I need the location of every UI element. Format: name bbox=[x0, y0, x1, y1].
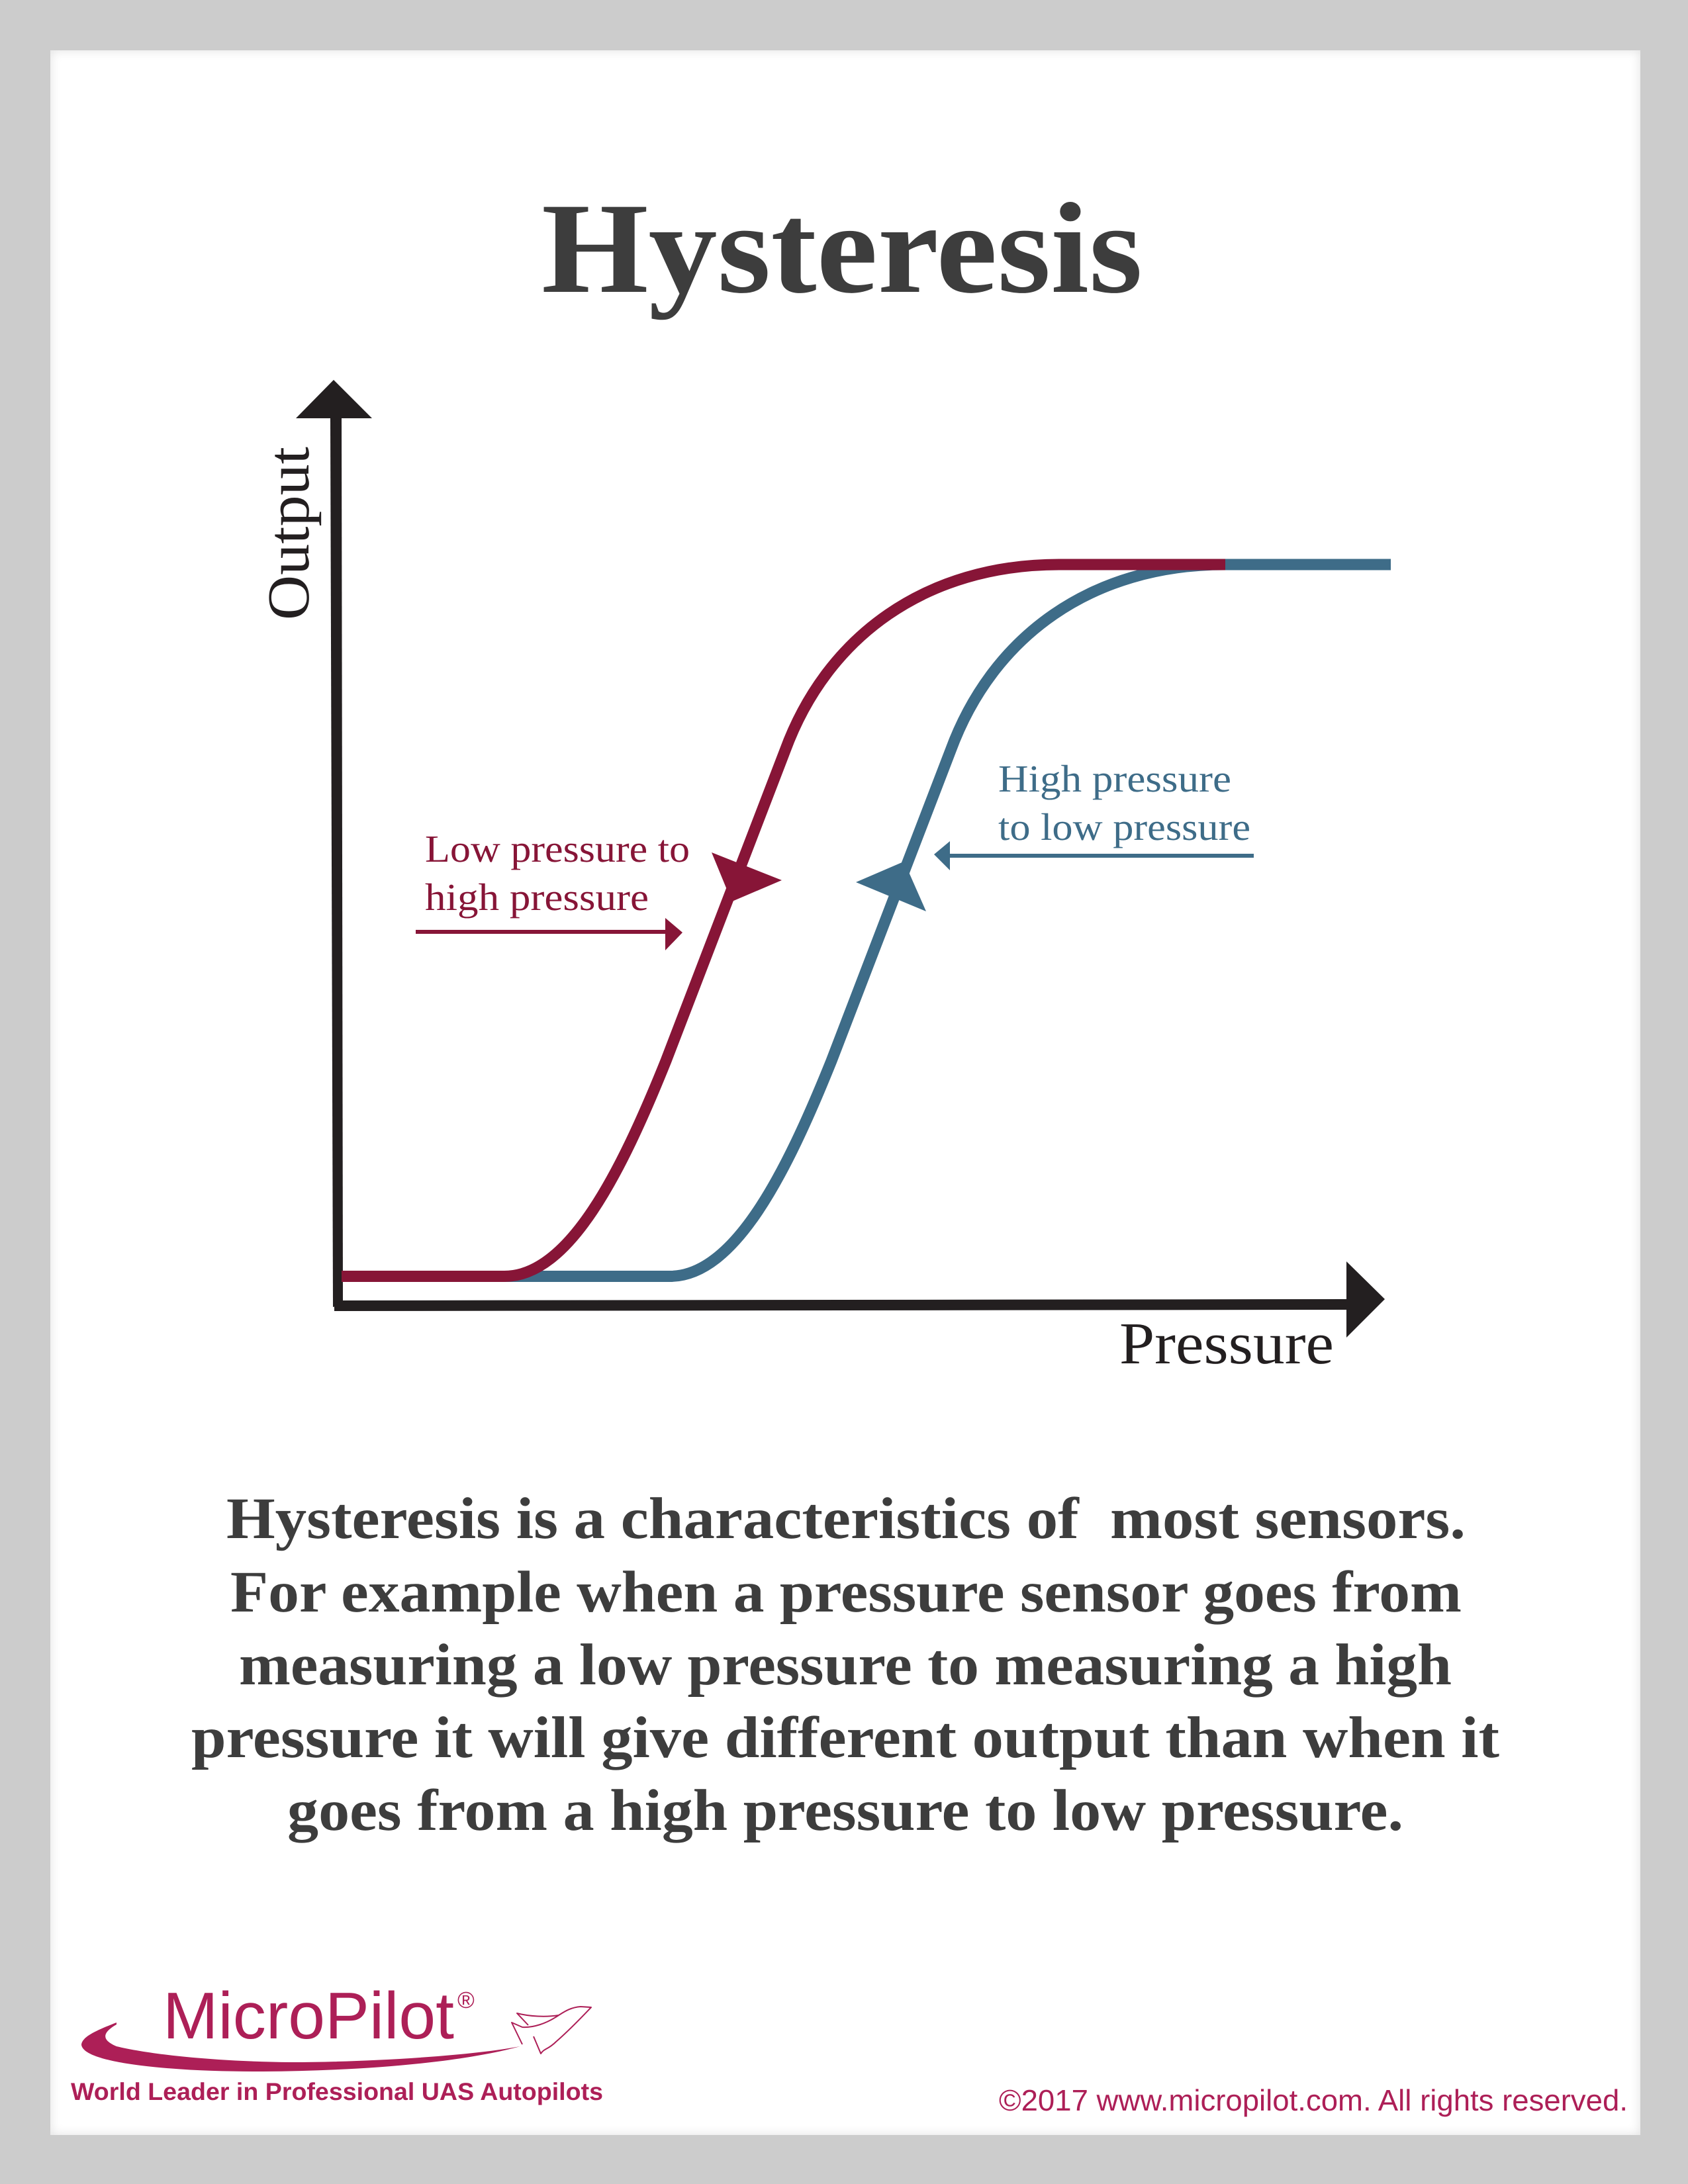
callout: high to low pressure: High pressure bbox=[998, 757, 1231, 800]
title: Hysteresis bbox=[541, 177, 1143, 320]
copyright notice: ©2017 www.micropilot.com. All rights reserved. bbox=[999, 2083, 1628, 2117]
curve: low to high pressure bbox=[342, 565, 1225, 1276]
x axis label: Pressure bbox=[1119, 1311, 1334, 1377]
icon: plane outline bbox=[512, 2007, 591, 2054]
logo wordmark: MicroPilot bbox=[163, 1979, 454, 2053]
callout: low to high pressure: high pressure bbox=[425, 876, 649, 919]
registered mark: ® bbox=[457, 1987, 475, 2013]
logo swoosh bbox=[81, 2023, 520, 2071]
callout: low to high pressure bbox=[416, 827, 690, 950]
callout: low to high pressure: Low pressure to bbox=[425, 827, 690, 870]
logo: MicroPilot bbox=[71, 1979, 603, 2105]
callout: high to low pressure bbox=[934, 757, 1254, 870]
text block: explanation: For example when a pressure sensor goes from bbox=[230, 1560, 1462, 1625]
y axis label: Output bbox=[256, 447, 322, 620]
callout: high to low pressure: to low pressure bbox=[998, 805, 1250, 848]
chart: hysteresis loop bbox=[256, 380, 1391, 1377]
curve: high to low pressure bbox=[503, 565, 1391, 1276]
text block: explanation: measuring a low pressure to measuring a high bbox=[239, 1633, 1452, 1698]
y axis arrow bbox=[296, 380, 372, 1307]
arrowhead: blue direction bbox=[856, 862, 926, 911]
text block: explanation bbox=[191, 1486, 1499, 1843]
x axis arrow bbox=[334, 1261, 1385, 1338]
text block: explanation: pressure it will give different output than when it bbox=[191, 1706, 1499, 1770]
text block: explanation: goes from a high pressure to low pressure. bbox=[287, 1778, 1403, 1843]
logo tagline: World Leader in Professional UAS Autopilots bbox=[71, 2078, 603, 2105]
text block: explanation: Hysteresis is a characteristics of most sensors. bbox=[226, 1486, 1466, 1551]
arrowhead: red direction bbox=[712, 852, 782, 901]
